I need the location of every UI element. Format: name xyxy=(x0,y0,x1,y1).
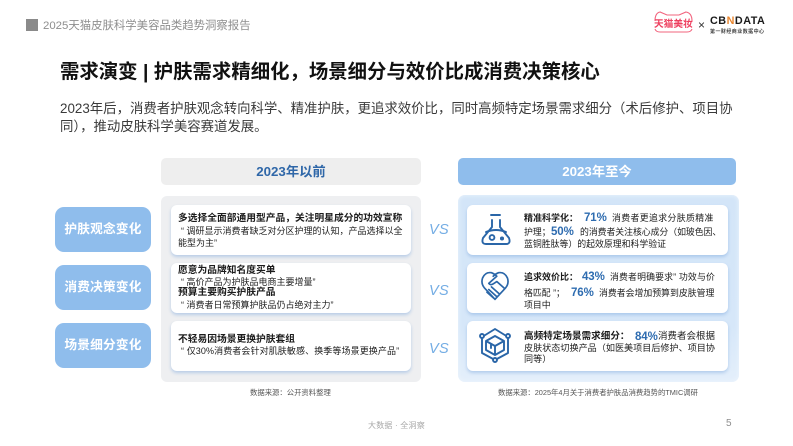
VS marker row 1: VS xyxy=(429,222,449,238)
text: value for money: 消费者明确要求” 功效与价 xyxy=(610,272,715,282)
row label: scenario segmentation xyxy=(55,323,151,368)
panel: before 2023 xyxy=(161,196,421,382)
text: scenario needs: 高频特定场景需求细分： xyxy=(524,331,630,342)
column header: 2023 to now xyxy=(458,158,736,185)
card: precise science xyxy=(467,205,728,255)
logo: Tmall wordmark: 天猫美妆 xyxy=(654,19,693,30)
icon: hexagon cube xyxy=(479,328,511,363)
text: value for money xyxy=(524,271,715,310)
intro paragraph: 2023年后，消费者护肤观念转向科学、精准护肤，更追求效价比，同时高频特定场景需求细分（术后修护、项目协 xyxy=(60,101,733,116)
card: scenario before xyxy=(171,321,411,371)
VS marker row 3: VS xyxy=(429,341,449,357)
text: concept before: 多选择全面部通用型产品，关注明星成分的功效宣称 xyxy=(178,213,402,224)
text: value for money: 格匹配 ”； xyxy=(524,288,565,298)
card: decision before xyxy=(171,263,411,313)
report name: 2025天猫皮肤科学美容品类趋势洞察报告 xyxy=(43,20,251,32)
text: decision before: 预算主要购买护肤产品 xyxy=(178,287,276,298)
page number: 5 xyxy=(726,418,732,429)
text: decision before: “ 高价产品为护肤品电商主要增量” xyxy=(181,277,316,287)
text: precise science: 50% xyxy=(551,226,574,238)
text: precise science xyxy=(524,212,721,249)
card: scenario needs xyxy=(467,321,728,371)
logo: Tmall Beauty x CBNData xyxy=(654,11,765,35)
row label: skincare concept xyxy=(55,207,151,252)
card: concept before xyxy=(171,205,411,255)
intro paragraph: 同），推动皮肤科学美容赛道发展。 xyxy=(60,119,268,134)
text: precise science: 精准科学化： xyxy=(524,213,578,223)
text: decision before xyxy=(178,264,334,310)
logo: CBN subtitle: 第一财经商业数据中心 xyxy=(710,29,765,35)
text: scenario needs: 皮肤状态切换产品（如医美项目后修护、项目协 xyxy=(524,343,715,353)
text: scenario needs: 消费者会根据 xyxy=(658,331,715,342)
intro paragraph xyxy=(60,101,733,134)
title: 需求演变 | 护肤需求精细化，场景细分与效价比成消费决策核心 xyxy=(60,61,600,83)
column header: before 2023: 2023年以前 xyxy=(256,164,326,179)
text: value for money: 追求效价比： xyxy=(524,272,578,282)
logo: cross: × xyxy=(698,18,705,32)
column header: 2023 to now: 2023年至今 xyxy=(562,164,632,179)
logo: CBNDATA wordmark: CBNDATA xyxy=(710,15,765,27)
text: precise science: 蓝铜胜肽等）的起效原理和科学验证 xyxy=(524,239,666,249)
text: concept before: 能型为主” xyxy=(178,238,217,248)
header marker square xyxy=(26,19,38,31)
text: decision before: “ 消费者日常预算护肤品仍占绝对主力” xyxy=(181,300,334,310)
text: scenario before: “ 仅30%消费者会针对肌肤敏感、换季等场景更换产品” xyxy=(181,346,399,356)
text: scenario before: 不轻易因场景更换护肤套组 xyxy=(178,334,295,345)
icon: flask xyxy=(482,214,510,245)
text: value for money: 消费者会增加预算到皮肤管理 xyxy=(599,288,714,298)
text: scenario before xyxy=(178,334,399,356)
column header: before 2023 xyxy=(161,158,421,185)
text: value for money: 76% xyxy=(571,287,594,299)
icon: handshake heart xyxy=(481,272,509,300)
text: precise science: 71% xyxy=(584,212,607,224)
text: precise science: 的消费者关注核心成分（如玻色因、 xyxy=(580,227,721,237)
footer slogan: 大数据 · 全洞察 xyxy=(368,421,425,430)
text: value for money: 项目中 xyxy=(524,300,551,310)
source note right: 数据来源：2025年4月关于消费者护肤品消费趋势的TMIC调研 xyxy=(498,388,698,397)
text: precise science: 护理； xyxy=(524,227,551,237)
text: concept before xyxy=(178,212,402,248)
text: decision before: 愿意为品牌知名度买单 xyxy=(178,265,276,276)
row label: skincare concept: 护肤观念变化 xyxy=(64,222,142,236)
text: scenario needs: 同等） xyxy=(524,354,551,364)
text: scenario needs: 84% xyxy=(635,331,658,343)
row label: consumption decision xyxy=(55,265,151,310)
row label: scenario segmentation: 场景细分变化 xyxy=(64,338,142,352)
card: value for money xyxy=(467,263,728,313)
text: concept before: “ 调研显示消费者缺乏对分区护理的认知，产品选择以全 xyxy=(181,226,402,236)
text: scenario needs xyxy=(524,330,715,364)
text: precise science: 消费者更追求分肤质精准 xyxy=(612,213,714,223)
row label: consumption decision: 消费决策变化 xyxy=(64,280,142,294)
panel: 2023 to now xyxy=(458,195,739,382)
VS marker row 2: VS xyxy=(429,283,449,299)
logo: Tmall cat outline xyxy=(654,11,693,32)
text: value for money: 43% xyxy=(582,271,605,283)
source note left: 数据来源：公开资料整理 xyxy=(250,388,331,397)
